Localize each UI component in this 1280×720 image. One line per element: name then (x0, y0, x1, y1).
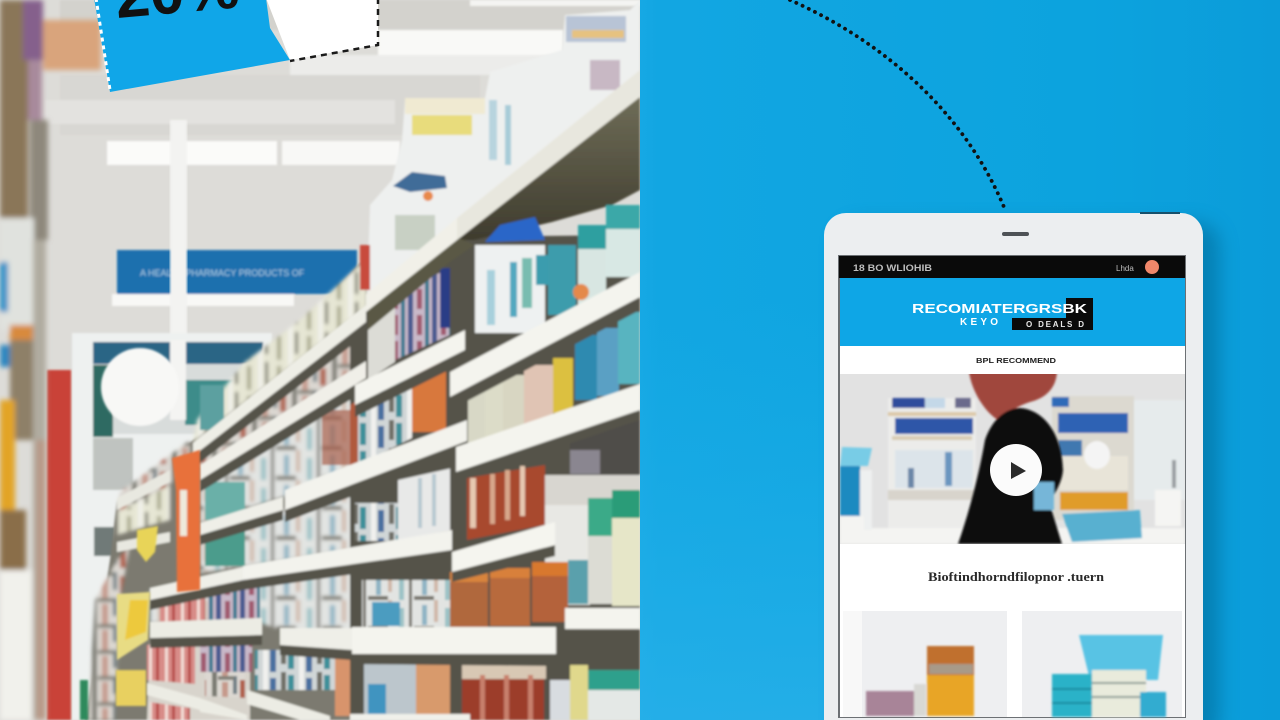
shadows under shelf lips (150, 297, 640, 666)
third tier boxes and bottles (575, 335, 597, 400)
blue page header: KEYO (960, 317, 998, 328)
second tier bottles (475, 245, 545, 333)
tablet body (824, 213, 1203, 720)
left foreground shelf (0, 0, 101, 720)
product card: blue packs (1022, 611, 1182, 717)
fourth tier bottles (467, 465, 545, 540)
product card: orange packs (843, 611, 1007, 717)
shelf lips (457, 70, 640, 240)
back doorway (72, 333, 272, 720)
fifth tier bottles (450, 572, 488, 627)
tablet device (824, 212, 1220, 720)
presenter figure (958, 372, 1063, 544)
blue store sign (112, 250, 357, 306)
red column (47, 370, 71, 720)
blue page header: O DEALS D (1026, 320, 1084, 329)
right dark gap (570, 412, 640, 480)
play button (990, 444, 1042, 496)
product shelves (85, 0, 640, 720)
panel: blue promotional background (640, 0, 1280, 720)
blue page header (840, 278, 1185, 346)
tablet screen (838, 255, 1186, 718)
blue store sign: A HEALTH PHARMACY PRODUCTS OF (140, 268, 305, 278)
page subheading: BPL RECOMMEND (976, 356, 1057, 365)
panel: store aisle photo (0, 0, 640, 720)
blue page header: RECOMIATERGRSBK (912, 301, 1088, 316)
bottom tier bottles (462, 678, 544, 720)
support pole (169, 120, 188, 334)
ceiling lights (45, 0, 640, 165)
coupon: 20% discount tag (94, 0, 378, 92)
far shelf backing (85, 255, 367, 720)
orange hanging banner (172, 450, 200, 592)
video thumbnail (840, 372, 1185, 544)
yellow shelf tags (80, 526, 158, 720)
section heading: Bioftindhorndfilopnor .tuern (928, 569, 1105, 584)
upper stock boxes (367, 0, 640, 295)
hanging white globe (101, 348, 179, 426)
status bar: Lhda (1116, 264, 1134, 273)
dotted arc (790, 0, 1006, 212)
near shelf backing (450, 235, 640, 720)
top shelf underside (457, 95, 640, 240)
mid shelf products (394, 272, 452, 361)
black badge (1012, 298, 1093, 330)
far shelf tiers (88, 258, 367, 720)
camera slot (1002, 232, 1029, 236)
coupon white stub (266, 0, 378, 60)
mid shelf backing (348, 261, 452, 716)
status bar: 18 BO WLIOHIB (853, 263, 933, 273)
coupon blue body (94, 0, 290, 92)
status bar (839, 256, 1185, 278)
tablet shadow (838, 222, 1220, 720)
